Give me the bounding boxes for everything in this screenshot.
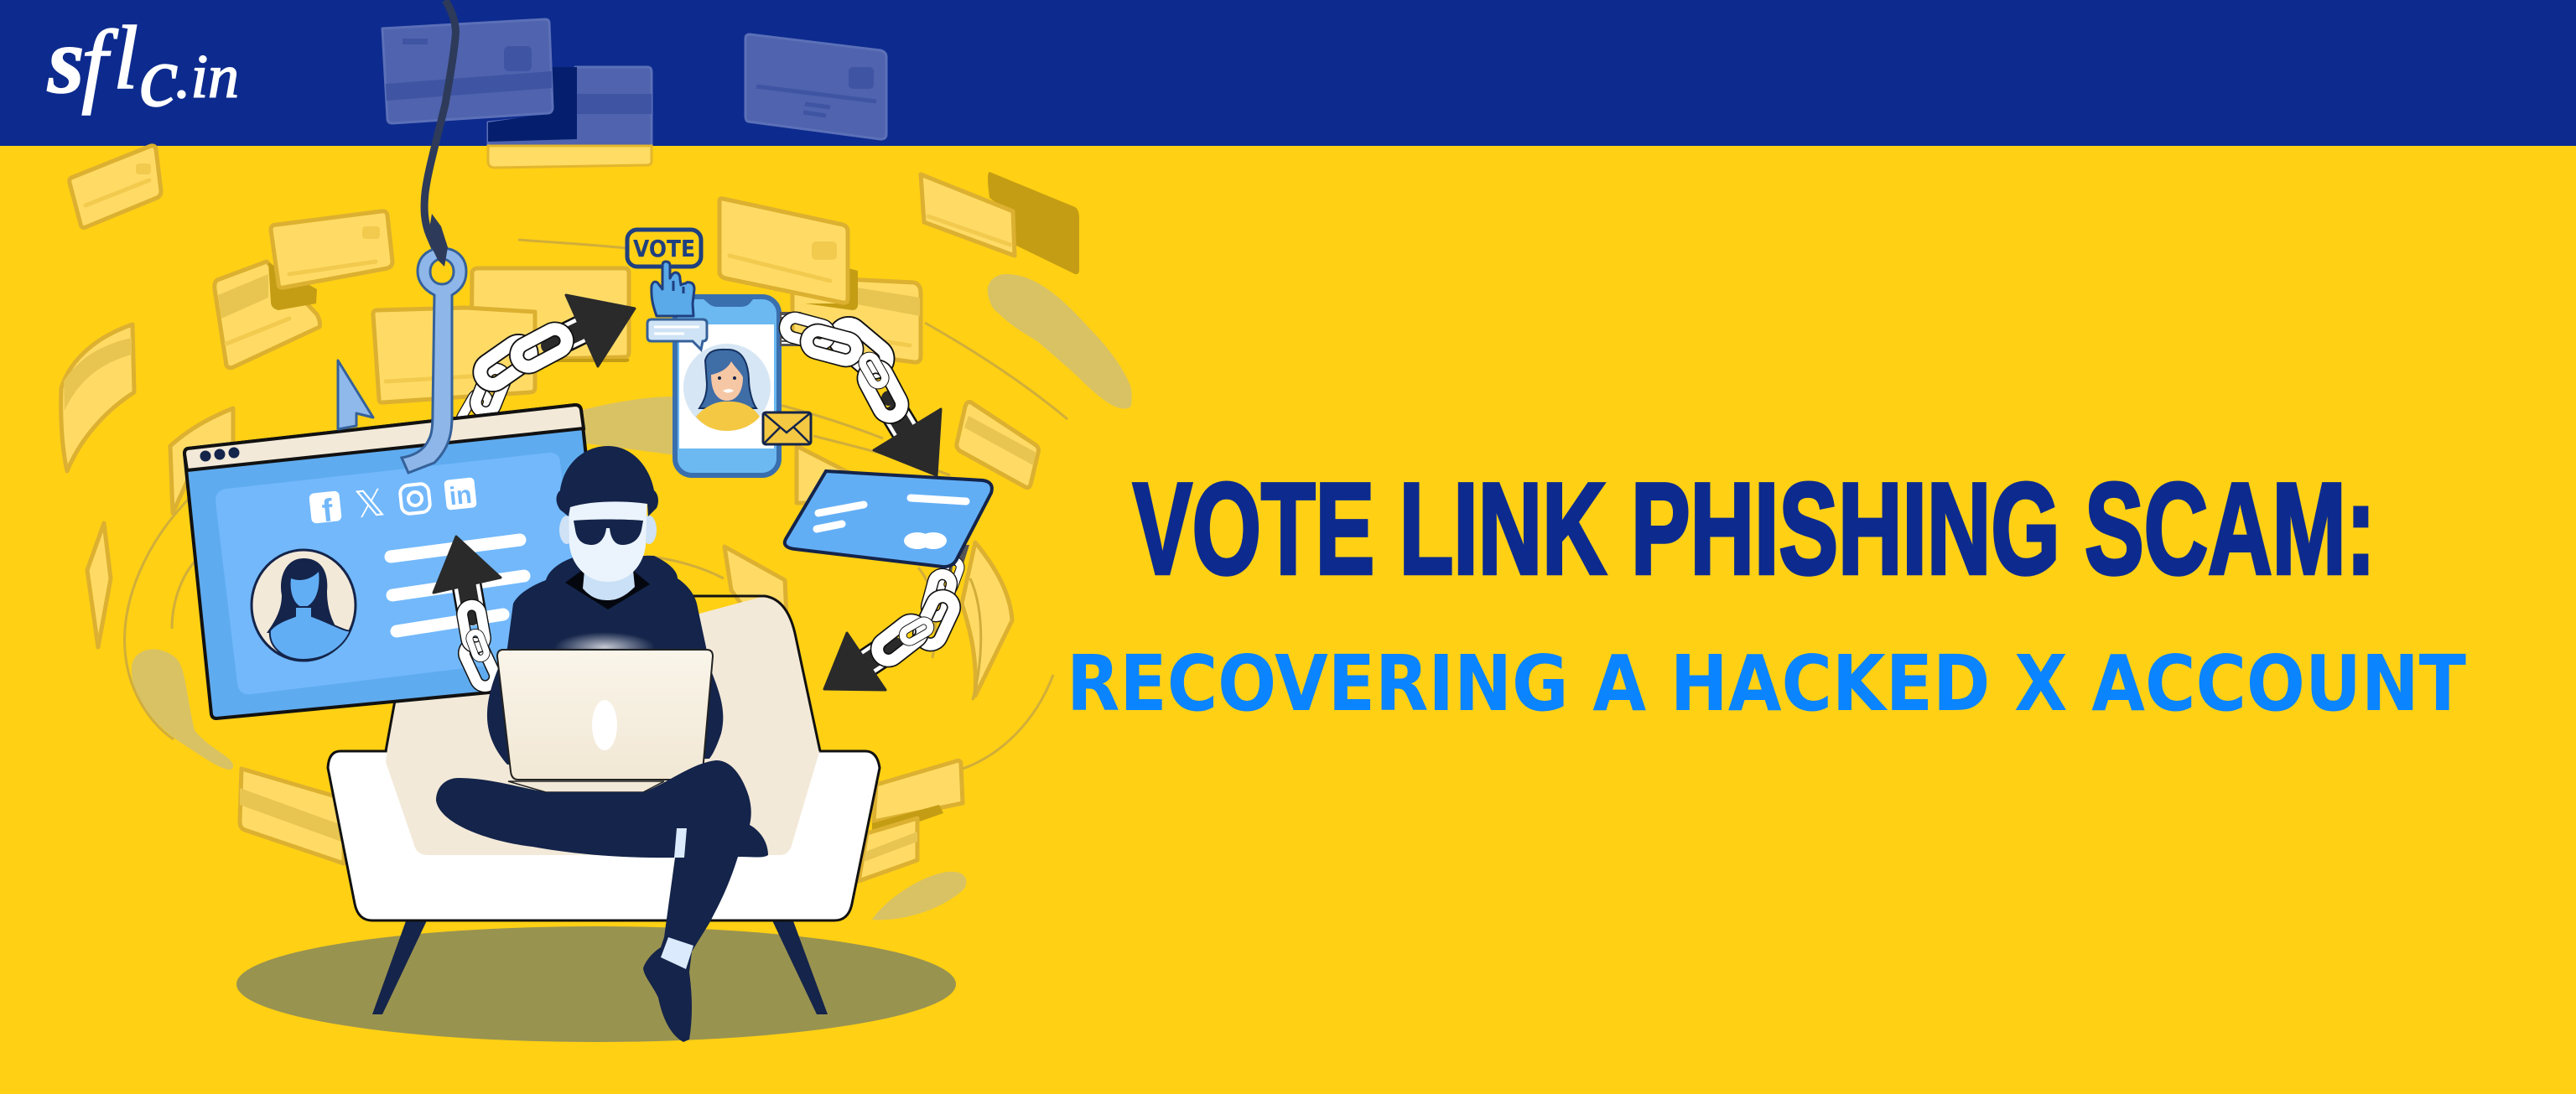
hacker torso bbox=[487, 556, 723, 765]
hacker collar and neck bbox=[565, 568, 650, 609]
linkedin: in bbox=[448, 481, 473, 511]
fishing hook bbox=[402, 214, 466, 473]
facebook bbox=[309, 490, 343, 531]
logo: sflc.in: .in bbox=[175, 43, 239, 111]
logo: sflc.in: s bbox=[47, 9, 85, 113]
hacker mask bbox=[569, 495, 647, 582]
arrow chain: phone to card bbox=[780, 312, 941, 475]
profile text lines bbox=[391, 540, 524, 631]
logo: sflc.in bbox=[47, 8, 239, 125]
hacker ears bbox=[559, 516, 657, 544]
arrow chain: card to chair bbox=[824, 545, 969, 690]
phone notch bbox=[703, 298, 754, 307]
header faded cards bbox=[382, 19, 886, 168]
instagram bbox=[399, 483, 431, 515]
window panel bbox=[216, 453, 583, 694]
swirl arcs bbox=[125, 240, 1067, 769]
armchair bbox=[328, 596, 880, 1014]
vote button bbox=[627, 230, 701, 267]
tan swoosh blobs bbox=[132, 274, 1132, 920]
hacker beanie bbox=[557, 446, 658, 516]
profile avatar bbox=[252, 550, 356, 661]
header band bbox=[0, 0, 2576, 146]
pointing hand bbox=[652, 262, 694, 316]
phone screen bbox=[679, 324, 774, 448]
payment card bbox=[785, 471, 992, 567]
scattered credit cards bbox=[61, 146, 1079, 881]
x logo: 𝕏 bbox=[353, 481, 387, 527]
social icons bbox=[309, 477, 477, 531]
browser window bbox=[184, 405, 610, 718]
hacker legs bbox=[436, 760, 768, 1042]
facebook: f bbox=[320, 493, 335, 529]
speech bubble bbox=[647, 319, 707, 350]
knee gap bbox=[674, 828, 687, 858]
window dots bbox=[200, 448, 240, 461]
arrow chain: window to phone bbox=[458, 295, 635, 431]
envelope icon bbox=[763, 412, 811, 444]
sunglasses bbox=[574, 520, 643, 545]
phone avatar bbox=[683, 344, 771, 431]
sock bbox=[661, 937, 693, 969]
screen glow bbox=[554, 632, 655, 662]
chair seat bbox=[328, 751, 880, 920]
phone body bbox=[675, 297, 779, 475]
vote button: VOTE bbox=[633, 235, 695, 262]
logo: sflc.in: f bbox=[81, 12, 119, 116]
laptop bbox=[497, 650, 713, 792]
chair legs bbox=[372, 919, 828, 1014]
phone bbox=[675, 297, 811, 475]
logo: sflc.in: l bbox=[113, 8, 138, 108]
fishing line bbox=[424, 0, 455, 258]
arrow chain: up into window bbox=[434, 537, 501, 690]
ground shadow bbox=[236, 926, 956, 1042]
cursor bbox=[338, 360, 373, 429]
chair back bbox=[386, 596, 820, 855]
hacker bbox=[436, 446, 768, 1042]
window title bar bbox=[184, 405, 584, 470]
logo: sflc.in: c bbox=[139, 29, 178, 125]
linkedin bbox=[444, 477, 477, 511]
